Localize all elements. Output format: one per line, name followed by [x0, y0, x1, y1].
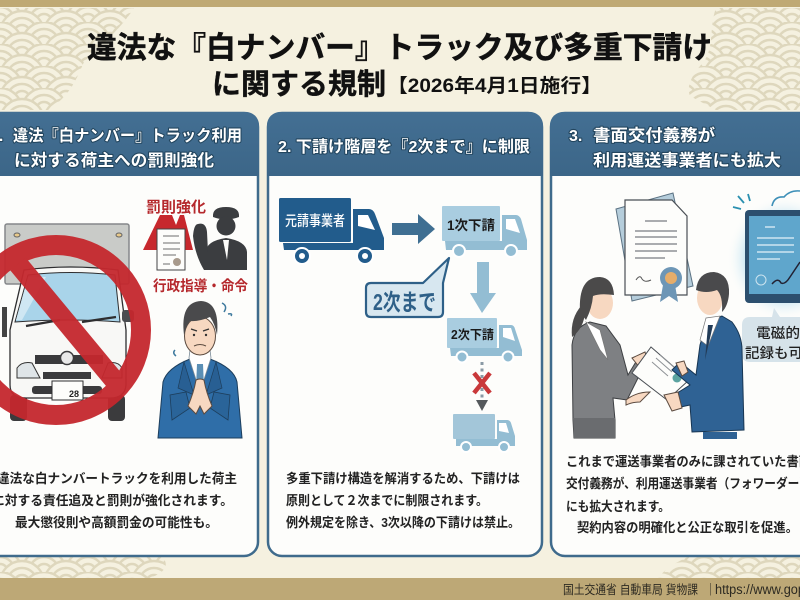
callout: electronic records allowed: 電磁的 [756, 325, 800, 341]
panel 2 body text [286, 471, 520, 530]
panel 2 card [268, 113, 542, 556]
panel 2 heading: 2. 下請け階層を『2次まで』に制限 [278, 138, 530, 156]
label: second tier: 2次下請 [451, 327, 494, 342]
panel 1 body text: 違法な白ナンバートラックを利用した荷主 [0, 471, 237, 486]
panel 2 body text: 例外規定を除き、3次以降の下請けは禁止。 [286, 515, 520, 530]
illustration: apologetic shipper [158, 301, 242, 438]
truck: first tier [442, 206, 527, 257]
bottom gold band [0, 578, 800, 600]
panel 1 heading [0, 126, 242, 170]
top gold band [0, 0, 800, 7]
icon: officer stop gesture [193, 207, 247, 270]
title line 2: に関する規制 [212, 68, 386, 101]
label: prime contractor: 元請事業者 [285, 213, 345, 230]
illustration: handed document [632, 347, 689, 400]
callout: electronic records allowed: 記録も可 [745, 345, 800, 361]
wave pattern: top left [0, 8, 134, 110]
arrow: to second tier [470, 262, 496, 313]
icon: prohibition sign [0, 245, 141, 415]
panel 1 card [0, 113, 258, 556]
panel 3: written delivery duty [550, 112, 800, 556]
effective date: 【2026年4月1日施行】 [387, 74, 602, 97]
callout: up to second tier [366, 258, 449, 317]
panel 1 body text: 最大懲役則や高額罰金の可能性も。 [15, 515, 218, 530]
panel 3 body text: にも拡大されます。 [566, 499, 670, 514]
panel 1 header [0, 112, 259, 176]
panel 3 header [550, 112, 800, 176]
panel 2 header [267, 112, 543, 176]
title line 1: 違法な『白ナンバー』トラック及び多重下請け [87, 32, 712, 65]
icon: gavel cover and document [143, 215, 193, 270]
illustration: man receiving document [664, 272, 744, 439]
arrow: to first tier [392, 214, 435, 244]
panel 1 heading: に対する荷主への罰則強化 [14, 151, 215, 170]
footer source: 国土交通省 自動車局 貨物課 [563, 582, 698, 597]
illustration: tablet with electronic signature [727, 191, 800, 320]
label: administrative guidance: 行政指導・命令 [153, 277, 248, 295]
truck: second tier [447, 318, 522, 362]
licence plate: 28 [69, 389, 79, 399]
illustration: certificate stack [616, 193, 693, 302]
panel 3 heading: 利用運送事業者にも拡大 [593, 151, 781, 170]
dotted connector [480, 362, 484, 400]
label: stricter penalties: 罰則強化 [146, 199, 206, 216]
wave pattern: bottom right [658, 556, 800, 578]
panel 3 heading [569, 125, 781, 170]
truck: prime contractor [279, 198, 384, 264]
panel 3 body text [566, 454, 800, 535]
icon: forbidden cross [474, 373, 490, 393]
panel 2: subcontract tier limit [267, 112, 543, 556]
panel 2 body text: 多重下請け構造を解消するため、下請けは [286, 471, 520, 486]
truck: third tier (forbidden) [453, 414, 515, 452]
label: first tier: 1次下請 [447, 217, 495, 233]
callout: up to second tier: 2次まで [373, 289, 436, 315]
callout: electronic records allowed [742, 308, 800, 362]
illustration: woman handing document [572, 277, 650, 438]
footer source: ｜ [704, 582, 717, 597]
panel 1 body text [0, 471, 237, 530]
panel 1 heading: 違法『白ナンバー』トラック利用 [13, 126, 242, 145]
panel 1: shipper penalties [0, 112, 259, 556]
wave pattern: top right [689, 8, 800, 110]
panel 3 heading: 3. [569, 128, 582, 145]
title [87, 32, 712, 101]
panel 2 body text: 原則として２次までに制限されます。 [286, 493, 488, 508]
panel 3 card [551, 113, 800, 556]
icon: ribbon seal [660, 267, 682, 302]
licence plate [52, 381, 83, 400]
panel 3 heading: 書面交付義務が [593, 125, 716, 145]
illustration: white-plate truck [2, 224, 134, 421]
wave pattern: bottom left [0, 556, 166, 578]
arrow head: third tier [476, 400, 488, 411]
footer source [563, 582, 800, 597]
